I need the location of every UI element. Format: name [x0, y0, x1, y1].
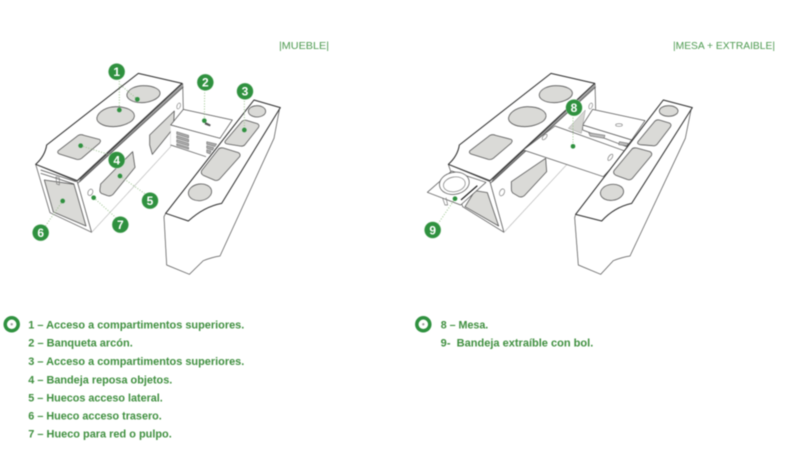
center seat — [568, 109, 645, 147]
legend item 4: 4 – Bandeja reposa objetos. — [28, 374, 172, 386]
legend: mueble — [5, 318, 244, 440]
badge 3: 3 — [242, 85, 249, 99]
badge 2 — [197, 74, 214, 91]
legend item 1: 1 – Acceso a compartimentos superiores. — [28, 320, 244, 332]
legend item 9: 9- Bandeja extraíble con bol. — [441, 338, 593, 350]
table — [523, 126, 627, 177]
badge 6: 6 — [37, 226, 44, 240]
legend bullet — [5, 318, 18, 331]
badge 1: 1 — [113, 65, 120, 79]
diagram: mesa + extraible — [424, 73, 692, 274]
badge 5 — [142, 192, 158, 209]
left bench unit — [36, 73, 183, 232]
badge 3 — [237, 83, 253, 100]
legend item 8: 8 – Mesa. — [441, 320, 488, 332]
badge 9 — [424, 222, 441, 238]
center seat with vents — [171, 109, 232, 157]
right bench unit — [575, 100, 692, 274]
badge 7 — [112, 216, 129, 233]
badge 4: 4 — [113, 153, 120, 167]
badge 8 — [566, 99, 582, 116]
badge 9: 9 — [429, 223, 436, 237]
legend item 7: 7 – Hueco para red o pulpo. — [28, 428, 172, 440]
badge 6 — [32, 224, 49, 241]
legend item 6: 6 – Hueco acceso trasero. — [28, 410, 162, 422]
legend: mesa + extraible — [417, 318, 593, 350]
callout leaders — [45, 78, 247, 227]
badge 7: 7 — [117, 218, 124, 232]
left bench unit — [448, 73, 596, 232]
badge 4 — [108, 152, 125, 168]
callout leaders — [438, 115, 575, 223]
legend item 3: 3 – Acceso a compartimentos superiores. — [28, 356, 244, 368]
heading: mesa + extraible: |MESA + EXTRAIBLE| — [673, 40, 775, 52]
legend item 2: 2 – Banqueta arcón. — [28, 338, 133, 350]
legend item 5: 5 – Huecos acceso lateral. — [28, 392, 163, 404]
badge 1 — [108, 63, 125, 80]
badge 5: 5 — [147, 194, 154, 208]
extractable tray with bowl — [427, 170, 486, 205]
right bench unit — [164, 100, 280, 274]
diagram: mueble — [32, 63, 280, 274]
legend bullet — [417, 318, 430, 331]
badge 8: 8 — [571, 101, 578, 115]
heading: mueble: |MUEBLE| — [279, 40, 329, 52]
badge 2: 2 — [202, 76, 209, 90]
